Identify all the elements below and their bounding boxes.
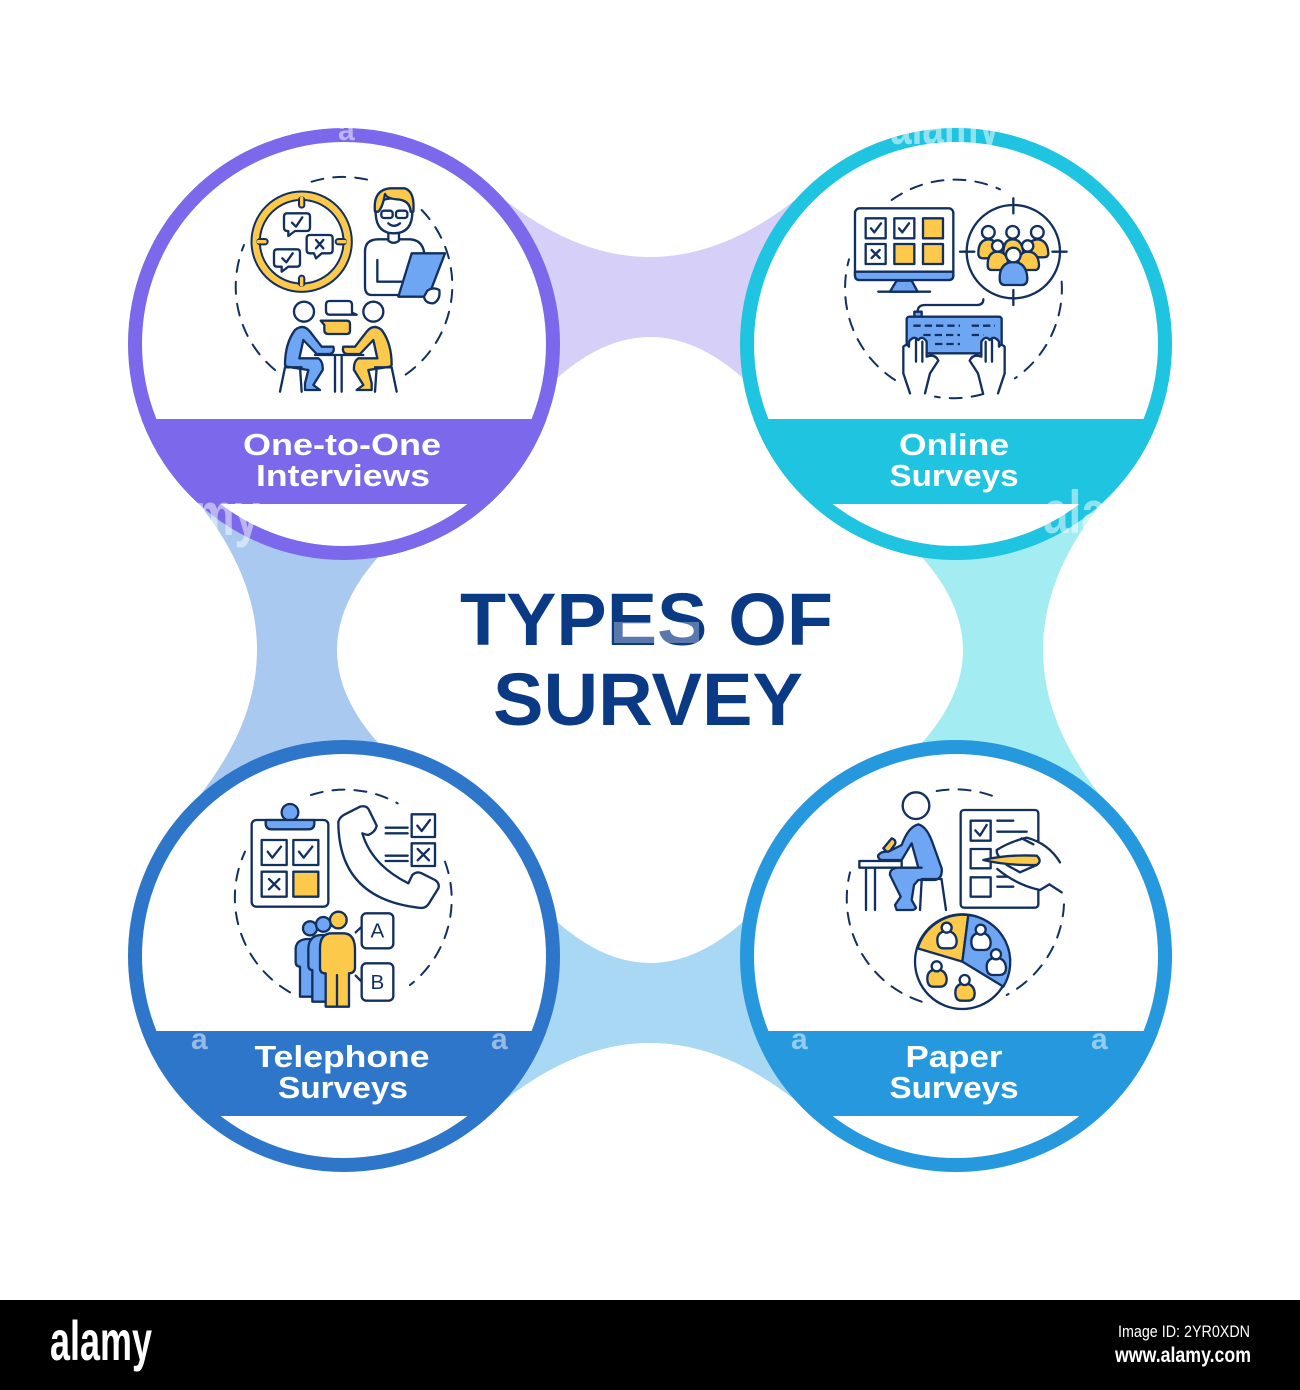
label: Online [899,427,1009,462]
watermark fragments: alamy [890,93,1000,156]
label: Surveys [278,1070,408,1105]
label: Surveys [890,458,1018,493]
image id: Image ID: 2YR0XDN [1118,1322,1250,1341]
icon: telephone [235,790,452,1007]
ring [135,747,553,1165]
label: Interviews [256,458,430,493]
ring [747,747,1165,1165]
footer bar [0,1300,1300,1390]
label band [141,1031,547,1116]
icon: paper [847,789,1064,1009]
label: Paper [906,1039,1002,1074]
icon: telephone: B [370,971,384,994]
label: Surveys [890,1070,1018,1105]
connector: right [920,505,1100,795]
watermark fragments: a [338,114,355,147]
watermark fragments: a [791,1023,808,1056]
ring [747,135,1165,553]
watermark fragments [130,93,1173,1056]
connector: left [200,505,380,795]
label band [141,419,547,504]
watermark fragments: alamy [130,481,260,548]
footer logo: alamy [50,1309,152,1372]
label band [753,1031,1159,1116]
title: TYPES OF [460,578,833,661]
watermark fragments: a [1091,1023,1108,1056]
panel: one-to-one interviews [135,135,553,553]
ring [135,135,553,553]
watermark fragments: a [491,1023,508,1056]
website: www.alamy.com [1114,1344,1251,1367]
label band [753,419,1159,504]
icon: online [845,180,1067,398]
connector: bottom [505,920,795,1100]
watermark fragments: a [191,1023,208,1056]
label: Telephone [254,1039,430,1074]
label: One-to-One [243,427,441,462]
icon: telephone: A [370,920,384,943]
connector: top [505,200,795,380]
panel: online surveys [747,135,1165,553]
icon: interviews [236,177,452,392]
panel: paper surveys [747,747,1165,1165]
title: SURVEY [493,658,803,741]
panel: telephone surveys [135,747,553,1165]
watermark fragments: alamy [1043,479,1173,546]
